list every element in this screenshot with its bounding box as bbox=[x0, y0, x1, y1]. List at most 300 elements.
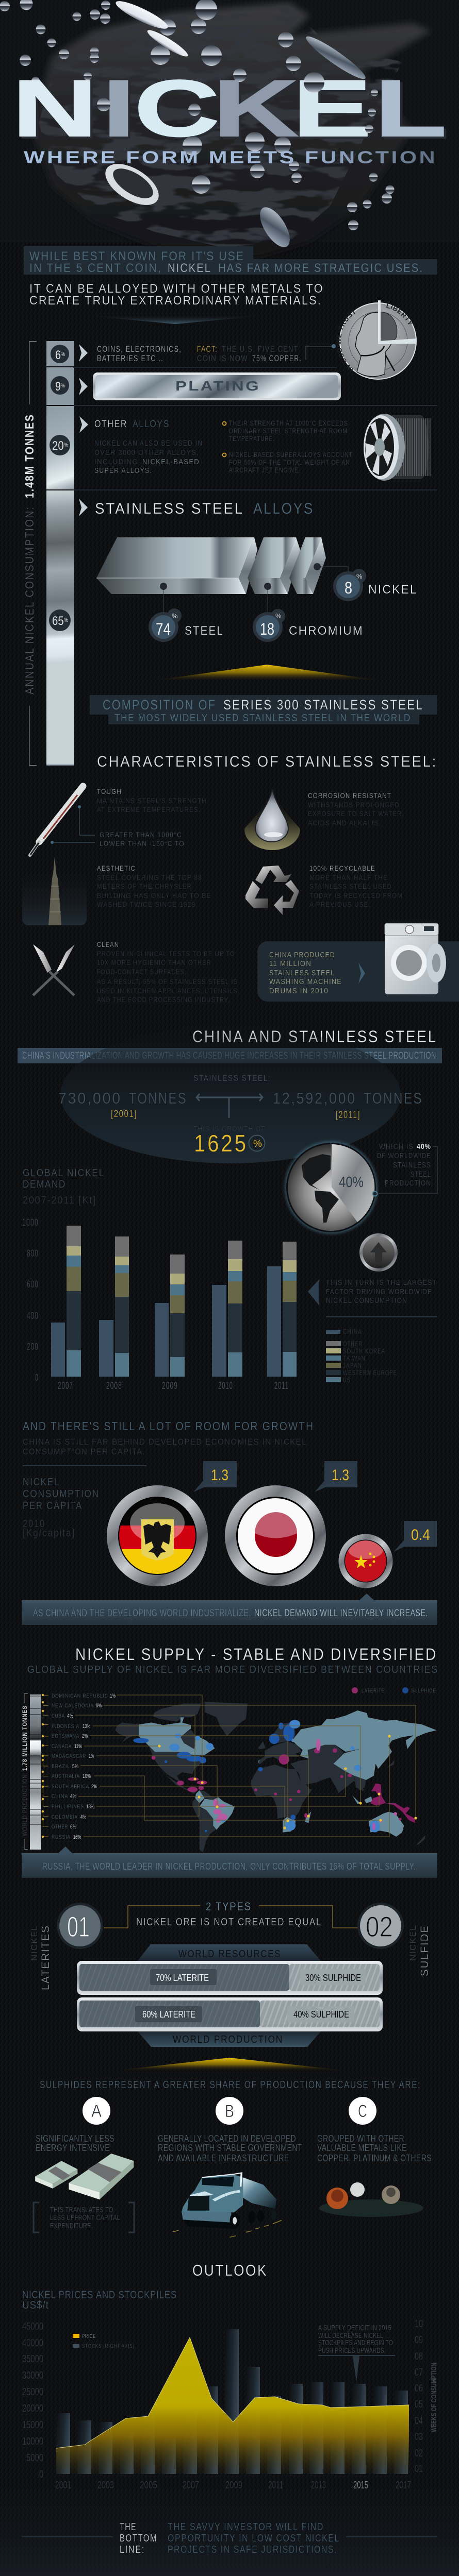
flag: germany bbox=[112, 1491, 202, 1581]
recyclable text: MORE THAN HALF THE bbox=[309, 873, 388, 882]
production bar bbox=[77, 1997, 383, 2031]
value callout 0.4: 0.4 bbox=[411, 1527, 430, 1544]
yellow glow bbox=[148, 665, 386, 681]
fact connector bbox=[306, 346, 334, 360]
production vertical label: 1.78 MILLION TONNES bbox=[21, 1705, 28, 1771]
country names: CANADA bbox=[52, 1743, 72, 1750]
corrosion text bbox=[308, 791, 404, 827]
right axis labels: 06 bbox=[415, 2383, 423, 2394]
icon: chrysler building bbox=[22, 857, 87, 925]
subtitle: WHERE FORM MEETS FUNCTION bbox=[24, 148, 437, 167]
panel: global nickel demand chart bbox=[22, 1167, 437, 1392]
left axis labels: 15000 bbox=[22, 2419, 43, 2431]
recyclable text: TODAY IS RECYCLED FROM bbox=[309, 891, 403, 900]
left axis labels: 20000 bbox=[22, 2403, 43, 2414]
callout text: THIS IN TURN IS THE LARGEST bbox=[326, 1278, 437, 1287]
china bars bbox=[51, 1266, 281, 1377]
badge: chromium bbox=[253, 609, 285, 642]
x axis labels: 2011 bbox=[268, 2480, 283, 2491]
icon: metal drop bbox=[244, 789, 300, 850]
badge 01 bbox=[57, 1903, 103, 1949]
badge: steel bbox=[149, 608, 182, 642]
country percentages: 4% bbox=[80, 1814, 86, 1820]
callout text: NICKEL CONSUMPTION bbox=[326, 1296, 407, 1305]
price area bbox=[56, 2337, 409, 2474]
icon: recycle symbol bbox=[245, 866, 299, 915]
right axis labels: 03 bbox=[415, 2431, 423, 2443]
plating bar frame bbox=[93, 372, 341, 400]
stacked bar 2008 bbox=[115, 1236, 129, 1377]
chevron pointer bbox=[308, 1279, 319, 1306]
intro banner text: IN THE 5 CENT COIN, bbox=[29, 261, 162, 275]
sulphide deposits west bbox=[133, 1720, 300, 1832]
right axis labels: 01 bbox=[415, 2463, 423, 2475]
connector dots bbox=[160, 563, 321, 590]
reason A text bbox=[36, 2133, 114, 2153]
country names: NEW CALEDONIA bbox=[52, 1703, 94, 1709]
other alloys text: INCLUDING bbox=[94, 457, 138, 466]
superalloy facts: NICKEL-BASED SUPERALLOYS ACCOUNT bbox=[229, 450, 353, 459]
world production label: WORLD PRODUCTION bbox=[173, 2034, 283, 2045]
icon: tanker truck bbox=[173, 2173, 282, 2237]
2 types heading: 2 TYPES bbox=[206, 1900, 252, 1913]
deficit pointer bbox=[318, 2355, 395, 2382]
clean text: 10X MORE HYGIENIC THAN OTHER bbox=[97, 958, 211, 967]
bottom glow bbox=[0, 2488, 459, 2576]
per capita label: 2010 bbox=[23, 1518, 45, 1530]
production bar: 40% SULPHIDE bbox=[293, 2009, 349, 2020]
stacked bar 2010 bbox=[228, 1241, 242, 1377]
worldwide text: PRODUCTION bbox=[385, 1179, 431, 1188]
callout text: STAINLESS STEEL bbox=[269, 969, 335, 977]
icon: up arrow button bbox=[359, 1233, 398, 1272]
gold connector lines bbox=[104, 1906, 358, 1928]
bottom line text: PROJECTS IN SAFE JURISDICTIONS. bbox=[168, 2544, 337, 2555]
tough text: TOUGH bbox=[97, 787, 122, 795]
value callout 1.3: 1.3 bbox=[332, 1467, 349, 1484]
reason C marker bbox=[349, 2097, 376, 2125]
deficit note: WILL DECREASE NICKEL bbox=[318, 2331, 383, 2340]
percent circle bbox=[249, 1136, 265, 1151]
reason A text: ENERGY INTENSIVE bbox=[36, 2143, 110, 2153]
callout text: 11 MILLION bbox=[269, 959, 312, 968]
temperature text bbox=[100, 831, 185, 848]
worldwide text bbox=[376, 1142, 431, 1188]
x axis labels: 2009 bbox=[225, 2480, 242, 2491]
not created equal: NICKEL ORE IS NOT CREATED EQUAL bbox=[136, 1917, 322, 1928]
country percentages: 6% bbox=[70, 1824, 76, 1830]
other alloys text bbox=[94, 439, 203, 475]
badge: nickel: % bbox=[356, 572, 363, 580]
percent labels: 9 bbox=[55, 380, 62, 394]
icon: globe 40 percent: 40% bbox=[339, 1174, 364, 1191]
stainless heading: ALLOYS bbox=[253, 500, 314, 517]
x axis labels: 2009 bbox=[162, 1380, 178, 1392]
bottom line label: BOTTOM bbox=[120, 2533, 157, 2544]
country percentages: 13% bbox=[86, 1804, 94, 1810]
production bar: 60% LATERITE bbox=[142, 2009, 195, 2020]
country percentages bbox=[67, 1693, 116, 1840]
x axis labels: 2008 bbox=[106, 1380, 122, 1392]
chart title: GLOBAL NICKEL bbox=[23, 1167, 105, 1179]
hero: liquid metal splash bbox=[31, 3, 431, 258]
clean text: CLEAN bbox=[97, 940, 119, 948]
intro statement bbox=[29, 282, 324, 308]
per capita label bbox=[23, 1477, 100, 1539]
reason A marker: A bbox=[91, 2102, 102, 2121]
flag: japan bbox=[231, 1491, 320, 1581]
right axis title: WEEKS OF CONSUMPTION bbox=[430, 2363, 438, 2432]
resources bar bbox=[77, 1961, 383, 1995]
production bracket bbox=[24, 1694, 28, 1850]
per capita label: PER CAPITA bbox=[23, 1500, 83, 1512]
panel: characteristics bbox=[22, 753, 459, 1004]
chart title bbox=[23, 1167, 105, 1206]
legend divider bbox=[326, 1316, 437, 1317]
bottom line text bbox=[168, 2521, 340, 2555]
panel: stainless steel alloys bbox=[90, 500, 437, 724]
bottom line dividers bbox=[22, 2536, 437, 2537]
callout arrow bbox=[358, 963, 365, 984]
y axis labels: 800 bbox=[27, 1248, 39, 1259]
left axis labels: 40000 bbox=[22, 2337, 43, 2349]
legend labels: SOUTH KOREA bbox=[343, 1347, 385, 1355]
coin description bbox=[97, 344, 182, 363]
connector dots bbox=[51, 805, 81, 844]
vertical labels left: LATERITES bbox=[40, 1925, 52, 1990]
recyclable text: 100% RECYCLABLE bbox=[309, 864, 375, 872]
reason A marker bbox=[83, 2097, 110, 2125]
production vertical label bbox=[21, 1705, 28, 1836]
clean text bbox=[97, 940, 240, 1004]
country names: RUSSIA bbox=[52, 1834, 71, 1840]
production vertical label: WORLD PRODUCTION: bbox=[21, 1772, 28, 1836]
percent labels: % bbox=[64, 617, 68, 623]
growth text bbox=[23, 1437, 307, 1456]
laterite deposits east bbox=[314, 1739, 415, 1823]
chromium block bbox=[248, 537, 300, 594]
coin fact: FACT: bbox=[197, 344, 218, 354]
worldwide text: STEEL bbox=[411, 1170, 431, 1179]
stacked metal bar bbox=[46, 341, 74, 766]
nickel block bbox=[289, 537, 326, 594]
world resources label: WORLD RESOURCES bbox=[178, 1948, 281, 1960]
price line bbox=[56, 2337, 409, 2448]
hero: balls over title bbox=[97, 72, 378, 156]
connector dot bbox=[332, 344, 336, 348]
legend labels: OTHER bbox=[343, 1340, 363, 1348]
per capita label: CONSUMPTION bbox=[23, 1488, 100, 1500]
callout text: CHINA PRODUCED bbox=[269, 951, 335, 959]
country percentages: 1% bbox=[110, 1693, 116, 1699]
badge: nickel bbox=[333, 569, 366, 601]
tonnes comparison bbox=[58, 1089, 423, 1107]
composition text: THE MOST WIDELY USED STAINLESS STEEL IN THE WORLD bbox=[114, 713, 411, 724]
light land east bbox=[292, 1710, 437, 1837]
per capita label: [Kg/capita] bbox=[23, 1528, 75, 1539]
composition text: COMPOSITION OF bbox=[103, 697, 216, 713]
icon: nickel coin: IN GOD WE TRUST bbox=[336, 309, 355, 372]
chart title: DEMAND bbox=[23, 1179, 66, 1190]
panel: coins bbox=[97, 300, 417, 380]
callout text bbox=[269, 951, 342, 995]
country names: PHILLIPINES bbox=[52, 1804, 84, 1810]
legend bbox=[73, 2333, 135, 2349]
corrosion text: ACIDS AND ALKALIS. bbox=[308, 819, 381, 827]
country names: MADAGASCAR bbox=[52, 1753, 86, 1759]
x axis labels: 2005 bbox=[140, 2480, 157, 2491]
conclusion banner bbox=[22, 1600, 437, 1625]
badge: chromium: % bbox=[275, 612, 282, 620]
block connectors bbox=[163, 567, 348, 613]
x axis labels: 2001 bbox=[55, 2480, 71, 2491]
country percentages: 2% bbox=[82, 1733, 88, 1739]
vertical labels left bbox=[29, 1925, 52, 1990]
plating label: PLATING bbox=[175, 378, 260, 394]
aesthetic text: AESTHETIC bbox=[97, 864, 136, 872]
reason A text: SIGNIFICANTLY LESS bbox=[36, 2133, 114, 2144]
superalloy facts: THEIR STRENGTH AT 1000°C EXCEEDS bbox=[229, 419, 348, 427]
right axis labels: 07 bbox=[415, 2367, 423, 2378]
laterite deposits west bbox=[152, 1754, 308, 1823]
location dots bbox=[158, 1735, 417, 1829]
hero: coin discs bbox=[99, 0, 369, 252]
deficit note bbox=[318, 2324, 393, 2355]
capex text: THIS TRANSLATES TO bbox=[50, 2206, 113, 2214]
tough text: MAINTAINS STEEL'S STRENGTH bbox=[97, 796, 207, 805]
composition text bbox=[103, 697, 423, 724]
growth text: CHINA IS STILL FAR BEHIND DEVELOPED ECONOMIES IN NICKEL bbox=[23, 1437, 307, 1447]
clean text: AND THE FOOD PROCESSING INDUSTRY. bbox=[97, 995, 230, 1004]
world resources tab bbox=[138, 1944, 321, 1961]
yellow glow bbox=[110, 2058, 351, 2071]
country names: CUBA bbox=[52, 1713, 65, 1719]
worldwide text: 40% bbox=[417, 1142, 431, 1151]
vertical label: ANNUAL NICKEL CONSUMPTION: bbox=[23, 506, 36, 694]
intro banner text bbox=[29, 249, 423, 275]
bottom line label: THE bbox=[120, 2521, 137, 2533]
double arrow bbox=[196, 1094, 263, 1118]
x axis labels: 2007 bbox=[58, 1380, 73, 1392]
country percentages: 5% bbox=[72, 1764, 78, 1770]
country percentages: 13% bbox=[83, 1723, 90, 1730]
country percentages: 4% bbox=[67, 1713, 73, 1719]
bottom line label bbox=[120, 2521, 157, 2555]
percent labels: % bbox=[61, 383, 65, 389]
vertical label: 1.48M TONNES bbox=[23, 414, 36, 498]
tonnes comparison: 12,592,000 bbox=[273, 1089, 356, 1107]
panel: outlook bbox=[0, 2261, 459, 2576]
panel: other alloys bbox=[94, 414, 431, 481]
coin fact bbox=[197, 344, 302, 363]
worldwide text: WHICH IS bbox=[379, 1142, 414, 1151]
value callout 1.3 bbox=[315, 1461, 357, 1492]
panel: china washing machines bbox=[257, 923, 459, 1002]
badge 02: 02 bbox=[366, 1910, 393, 1943]
intro banner shape bbox=[24, 246, 437, 275]
icon: globe 40 percent bbox=[285, 1141, 378, 1234]
percent badges bbox=[49, 345, 71, 631]
chromium label: CHROMIUM bbox=[289, 624, 364, 638]
left axis labels: 10000 bbox=[22, 2436, 43, 2447]
thermometer connectors bbox=[52, 807, 95, 842]
aesthetic text: STEEL COVERING THE TOP 88 bbox=[97, 873, 202, 882]
aesthetic text bbox=[97, 864, 211, 908]
short divider bbox=[23, 1465, 146, 1466]
worldwide text: STAINLESS bbox=[393, 1161, 431, 1170]
tonnes comparison: 730,000 bbox=[58, 1089, 122, 1107]
legend: PRICE bbox=[82, 2333, 96, 2340]
y axis labels: 1000 bbox=[22, 1217, 39, 1228]
country percentages: 4% bbox=[70, 1793, 76, 1800]
growth number: 1625 bbox=[194, 1130, 248, 1157]
country percentages: 2% bbox=[91, 1784, 97, 1790]
deficit note: STOCKPILES AND BEGIN TO bbox=[318, 2338, 393, 2347]
china banner bbox=[18, 1048, 442, 1063]
lens backdrop bbox=[60, 1026, 401, 1163]
superalloy facts: ORDINARY STEEL STRENGTH AT ROOM bbox=[229, 427, 348, 435]
x axis labels: 2017 bbox=[396, 2480, 411, 2491]
callout text: FACTOR DRIVING WORLDWIDE bbox=[326, 1287, 432, 1296]
bottom line text: OPPORTUNITY IN LOW COST NICKEL bbox=[168, 2533, 340, 2544]
nickel label: NICKEL bbox=[368, 583, 418, 597]
percent labels: 20 bbox=[52, 439, 66, 453]
legend labels: TAIWAN bbox=[343, 1354, 366, 1362]
vertical labels right: SULFIDE bbox=[419, 1925, 431, 1976]
coin description: BATTERIES ETC... bbox=[97, 353, 163, 363]
reason C marker: C bbox=[358, 2102, 367, 2121]
growth heading: AND THERE'S STILL A LOT OF ROOM FOR GROWTH bbox=[23, 1419, 314, 1433]
conclusion text: AS CHINA AND THE DEVELOPING WORLD INDUSTRIALIZE, bbox=[33, 1608, 251, 1619]
icon: jet engine bbox=[364, 414, 431, 481]
country percentages: 1% bbox=[89, 1753, 94, 1759]
other alloys heading bbox=[94, 419, 170, 430]
tough text bbox=[97, 787, 207, 814]
badge: steel: % bbox=[172, 612, 178, 620]
stacked bar 2009 bbox=[170, 1255, 185, 1377]
per capita label: NICKEL bbox=[23, 1477, 60, 1488]
globe connector bbox=[377, 1146, 437, 1194]
value callout 1.3 bbox=[193, 1461, 237, 1492]
icon: metal spheres bbox=[319, 2182, 423, 2217]
y axis labels: 400 bbox=[27, 1311, 39, 1321]
right axis labels: 04 bbox=[415, 2415, 423, 2427]
flag: china bbox=[341, 1537, 390, 1585]
legend labels: CHINA bbox=[343, 1327, 362, 1335]
country names: COLOMBIA bbox=[52, 1814, 78, 1820]
reason B text bbox=[158, 2133, 302, 2163]
pointer triangle bbox=[58, 1846, 72, 1853]
steel label: STEEL bbox=[185, 624, 224, 638]
x axis labels bbox=[58, 1380, 289, 1392]
chart title: NICKEL PRICES AND STOCKPILES bbox=[22, 2289, 177, 2301]
coin fact: THE U.S. FIVE CENT bbox=[222, 344, 299, 354]
aesthetic text: METERS OF THE CHRYSLER bbox=[97, 882, 192, 890]
steel block bbox=[96, 537, 257, 594]
dark land west bbox=[115, 1702, 312, 1852]
stacked bar 2011 bbox=[283, 1242, 297, 1377]
legend: STOCKS (RIGHT AXIS) bbox=[82, 2343, 135, 2349]
icon: nickel coin bbox=[336, 300, 417, 380]
y axis labels: 0 bbox=[35, 1372, 39, 1383]
chart title: 2007-2011 [Kt] bbox=[23, 1195, 96, 1206]
clean text: PROVEN IN CLINICAL TESTS TO BE UP TO bbox=[97, 950, 235, 958]
left axis labels: 25000 bbox=[22, 2386, 43, 2398]
badge 02 bbox=[357, 1903, 404, 1949]
deficit note: A SUPPLY DEFICIT IN 2015 bbox=[318, 2324, 391, 2332]
reason C text: GROUPED WITH OTHER bbox=[317, 2133, 404, 2144]
left axis labels: 35000 bbox=[22, 2353, 43, 2365]
section dividers bbox=[73, 367, 437, 490]
reason B text: GENERALLY LOCATED IN DEVELOPED bbox=[158, 2133, 296, 2144]
coin description: COINS, ELECTRONICS, bbox=[97, 344, 182, 354]
legend labels: US bbox=[343, 1376, 351, 1384]
panel: bottom line bbox=[22, 2521, 437, 2555]
bracket bbox=[29, 341, 37, 766]
country names: CHINA bbox=[52, 1793, 68, 1800]
left axis labels: 0 bbox=[39, 2469, 43, 2480]
badge: chromium: 18 bbox=[260, 620, 274, 638]
country names: DOMINICAN REPUBLIC bbox=[52, 1693, 108, 1699]
percent labels: 6 bbox=[55, 348, 62, 362]
hero background tint bbox=[0, 0, 459, 242]
other alloys heading: ALLOYS bbox=[133, 419, 170, 430]
x axis labels: 2003 bbox=[97, 2480, 114, 2491]
left axis labels: 30000 bbox=[22, 2370, 43, 2381]
clean text: USED IN KITCHEN APPLIANCES, UTENSILS, bbox=[97, 987, 240, 995]
production connectors bbox=[43, 1695, 48, 1837]
reason B marker: B bbox=[225, 2102, 234, 2121]
silver arrows bbox=[79, 344, 88, 516]
badge 01: 01 bbox=[67, 1910, 90, 1943]
chart title bbox=[22, 2289, 177, 2311]
capex text: LESS UPFRONT CAPITAL bbox=[50, 2213, 120, 2222]
aesthetic text: WASHED TWICE SINCE 1929. bbox=[97, 900, 198, 908]
x axis labels: 2007 bbox=[183, 2480, 199, 2491]
corrosion text: EXPOSURE TO SALT WATER, bbox=[308, 809, 404, 818]
country names: INDONESIA bbox=[52, 1723, 79, 1730]
country percentages: 10% bbox=[83, 1773, 91, 1780]
world production tab bbox=[138, 2031, 321, 2047]
legend labels: JAPAN bbox=[343, 1361, 362, 1369]
percent circle: % bbox=[253, 1139, 262, 1149]
worldwide text: OF WORLDWIDE bbox=[376, 1151, 431, 1160]
callout box bbox=[257, 941, 459, 1002]
reason C text: VALUABLE METALS LIKE bbox=[317, 2143, 407, 2153]
sulphide deposits east bbox=[350, 1746, 380, 1833]
recyclable text bbox=[309, 864, 403, 908]
reason B marker bbox=[216, 2097, 243, 2125]
x axis labels bbox=[55, 2480, 411, 2491]
other alloys text: NICKEL CAN ALSO BE USED IN bbox=[94, 439, 203, 448]
hero: ripple texture bbox=[39, 5, 402, 247]
callout text bbox=[326, 1278, 437, 1305]
year labels: [2001] bbox=[111, 1109, 137, 1120]
clean text: AS A RESULT, 65% OF STAINLESS STEEL IS bbox=[97, 977, 238, 986]
map legend: SULPHIDE bbox=[411, 1688, 436, 1694]
light land west bbox=[139, 1717, 311, 1833]
capex text: EXPENDITURE. bbox=[50, 2222, 93, 2230]
x axis labels: 2013 bbox=[311, 2480, 326, 2491]
year labels: [2011] bbox=[336, 1110, 360, 1121]
pointer triangle bbox=[359, 1594, 374, 1600]
tonnes comparison: TONNES bbox=[364, 1089, 423, 1107]
tough text: AT EXTREME TEMPERATURES. bbox=[97, 805, 201, 814]
other alloys text: OVER 3000 OTHER ALLOYS, bbox=[94, 448, 199, 457]
stock bars bbox=[56, 2329, 408, 2474]
callout text: DRUMS IN 2010 bbox=[269, 987, 329, 995]
reason B text: REGIONS WITH STABLE GOVERNMENT bbox=[158, 2143, 302, 2153]
